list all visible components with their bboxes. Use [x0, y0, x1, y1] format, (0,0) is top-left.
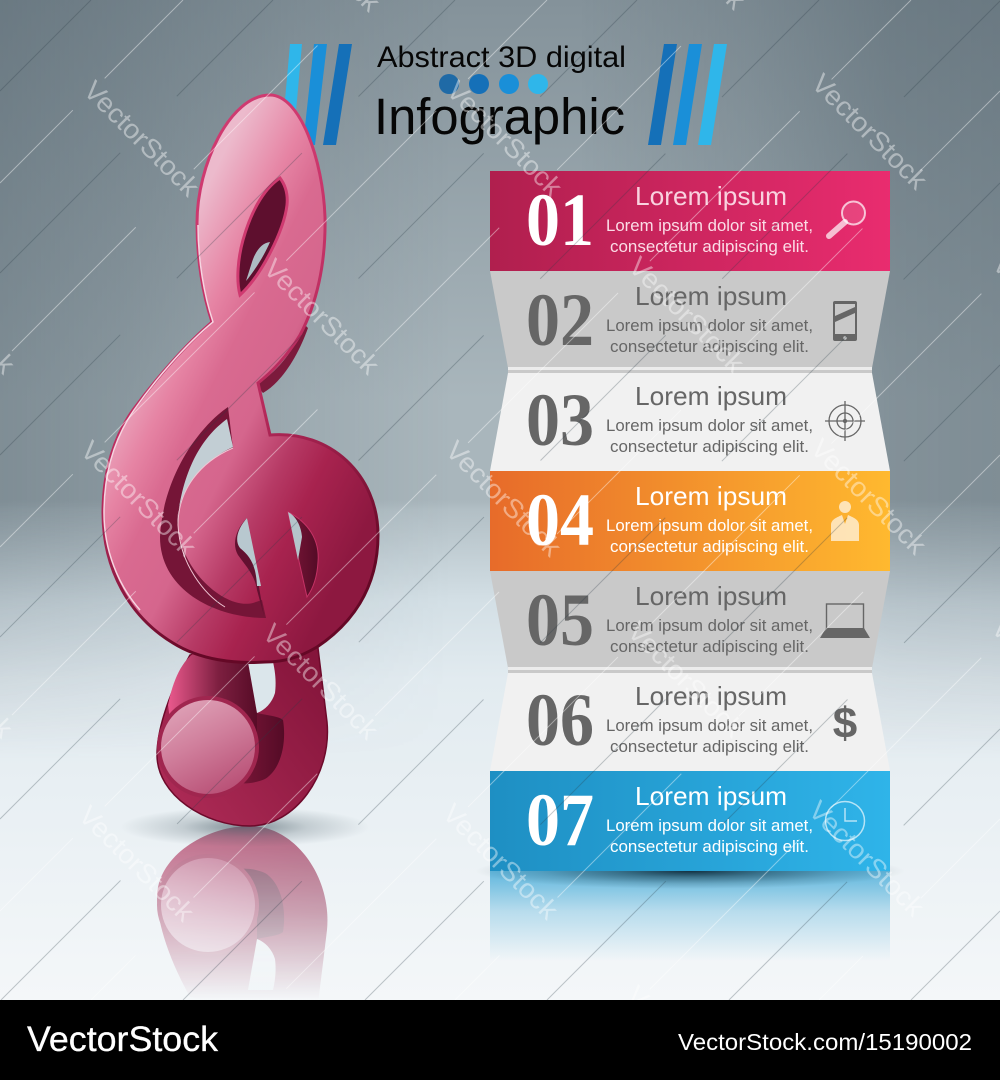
- four dots: [439, 74, 548, 94]
- item 01 panel: consectetur adipiscing elit.: [610, 238, 809, 256]
- middle opening: [235, 518, 264, 616]
- item 05 panel: Lorem ipsum dolor sit amet,: [606, 617, 813, 635]
- title line two: Infographic: [374, 88, 625, 145]
- icon: clock: [826, 802, 864, 840]
- watermarks: VectorStock: [622, 616, 749, 744]
- footer logo: VectorStock: [27, 1020, 219, 1059]
- item 03 panel: Lorem ipsum: [635, 381, 787, 411]
- item 04 panel: [490, 471, 890, 571]
- footer url: VectorStock.com/15190002: [678, 1029, 972, 1055]
- main curved gap: [160, 407, 266, 618]
- watermarks: V: [621, 980, 655, 1014]
- watermarks: VectorStock: [806, 68, 933, 196]
- item 06 panel: Lorem ipsum: [635, 681, 787, 711]
- item 07 panel: Lorem ipsum: [635, 781, 787, 811]
- ball face: [161, 700, 255, 794]
- clef floor shadow: [120, 807, 370, 847]
- icon: dollar: $: [833, 699, 857, 748]
- watermarks: VectorStock: [441, 75, 568, 203]
- item 03 panel: 03: [526, 379, 594, 462]
- icon: magnifier: [829, 202, 865, 236]
- item 04 panel: Lorem ipsum: [635, 481, 787, 511]
- item 07 panel: Lorem ipsum dolor sit amet,: [606, 817, 813, 835]
- item 01 panel: [490, 171, 890, 271]
- treble clef 3D note: [103, 95, 378, 826]
- icon: smartphone: [833, 301, 857, 341]
- icon: businessman: [831, 501, 859, 541]
- item 03 panel: Lorem ipsum dolor sit amet,: [606, 417, 813, 435]
- right opening: [288, 512, 318, 597]
- item 05 panel: consectetur adipiscing elit.: [610, 638, 809, 656]
- item 07 panel: 07: [526, 779, 594, 862]
- watermarks: VectorStock: [258, 253, 385, 381]
- item 02 panel: Lorem ipsum: [635, 281, 787, 311]
- ball rim: [157, 696, 259, 798]
- item 06 panel: consectetur adipiscing elit.: [610, 738, 809, 756]
- note tail and stem: [157, 640, 327, 826]
- footer bar: [0, 1000, 1000, 1080]
- gap background patch: [177, 419, 233, 523]
- watermarks: VectorStock: [257, 618, 384, 746]
- item 01 panel: Lorem ipsum: [635, 181, 787, 211]
- item 05 panel: Lorem ipsum: [635, 581, 787, 611]
- icon: laptop: [820, 604, 870, 638]
- upper eye opening: [238, 178, 287, 295]
- item 01 panel: 01: [526, 179, 594, 262]
- watermarks: VectorStock: [75, 435, 202, 563]
- item 05 panel: 05: [526, 579, 594, 662]
- item 01 panel: Lorem ipsum dolor sit amet,: [606, 217, 813, 235]
- watermarks: VectorStock: [440, 435, 567, 563]
- item 02 panel: Lorem ipsum dolor sit amet,: [606, 317, 813, 335]
- item 02 panel: consectetur adipiscing elit.: [610, 338, 809, 356]
- item 07 panel: [490, 771, 890, 871]
- item 06 panel: 06: [526, 679, 594, 762]
- item 07 panel: consectetur adipiscing elit.: [610, 838, 809, 856]
- item 06 panel: Lorem ipsum dolor sit amet,: [606, 717, 813, 735]
- item 06 panel: [490, 667, 890, 771]
- icon: target: [825, 401, 865, 441]
- left edge highlight: [104, 225, 213, 610]
- item 04 panel: consectetur adipiscing elit.: [610, 538, 809, 556]
- bar shadow: [475, 853, 905, 889]
- item 02 panel: 02: [526, 279, 594, 362]
- clef reflection: [157, 826, 328, 992]
- right background patch: [288, 512, 302, 560]
- fold: [508, 667, 872, 670]
- eye background patch: [246, 242, 270, 281]
- watermarks: VectorStock: [623, 251, 750, 379]
- watermarks: VectorStock: [803, 795, 930, 923]
- right slashes: [648, 44, 727, 145]
- item 02 panel: [490, 271, 890, 368]
- header title: [281, 41, 727, 145]
- watermarks: VectorStock: [73, 800, 200, 928]
- title line one: Abstract 3D digital: [377, 41, 626, 74]
- curl highlight: [178, 448, 233, 607]
- item 03 panel: [490, 367, 890, 471]
- cylinder connecting note ball: [168, 652, 257, 760]
- item 04 panel: 04: [526, 479, 594, 562]
- tail inner shadow: [238, 713, 284, 783]
- item 05 panel: [490, 571, 890, 668]
- main clef body: [103, 95, 378, 662]
- watermarks: VectorStock: [437, 798, 564, 926]
- middle background patch: [237, 518, 261, 586]
- item 03 panel: consectetur adipiscing elit.: [610, 438, 809, 456]
- left slashes: [281, 44, 352, 145]
- item 04 panel: Lorem ipsum dolor sit amet,: [606, 517, 813, 535]
- watermarks: VectorStock: [78, 75, 205, 203]
- tail opening: [248, 662, 276, 713]
- rear extrusion: [256, 325, 308, 393]
- fold: [508, 367, 872, 370]
- bar reflection: [490, 871, 890, 961]
- watermarks: VectorStock: [805, 433, 932, 561]
